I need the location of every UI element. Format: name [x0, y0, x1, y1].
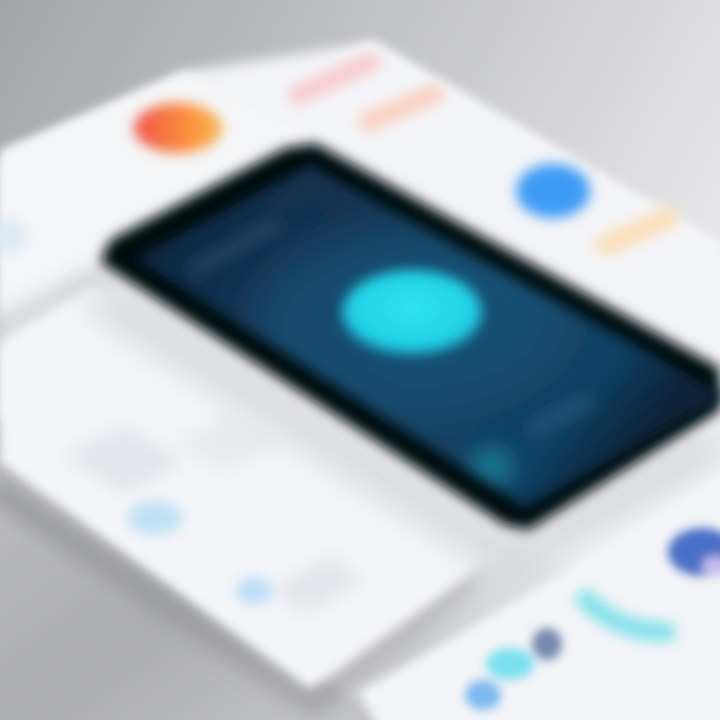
panel: white backing behind phone	[0, 42, 720, 600]
icon: blue circle	[516, 164, 590, 218]
icon: purple blue circle	[668, 528, 720, 576]
panel: upper right card	[240, 42, 720, 330]
screen lower label	[530, 400, 590, 430]
icon: light blue mark	[127, 501, 183, 535]
screen small teal dot	[472, 449, 512, 483]
icon: cyan and blue cluster	[465, 628, 562, 710]
icon: cyan swoosh	[586, 600, 666, 632]
icon: cyan central circle	[342, 270, 482, 354]
panel: lower right card	[358, 468, 720, 720]
panel: lower left card	[0, 285, 485, 715]
icon: orange circle	[134, 103, 222, 153]
pill: peach label	[368, 94, 434, 122]
phone screen	[136, 160, 720, 513]
screen text block	[190, 222, 280, 272]
pill: pink label	[298, 62, 370, 95]
phone	[90, 140, 720, 570]
text lines: blurred chart	[62, 415, 365, 615]
icon: pale blue mark	[0, 218, 26, 254]
card shadow	[0, 470, 480, 715]
icon: blue dot	[236, 577, 272, 605]
gap between lower cards	[350, 560, 600, 720]
pill: amber label	[606, 218, 668, 245]
screen glow	[250, 230, 570, 410]
phone shadow	[90, 285, 720, 570]
panel: upper left card	[0, 72, 320, 320]
phone body	[100, 143, 720, 530]
gap between left cards	[0, 268, 120, 350]
